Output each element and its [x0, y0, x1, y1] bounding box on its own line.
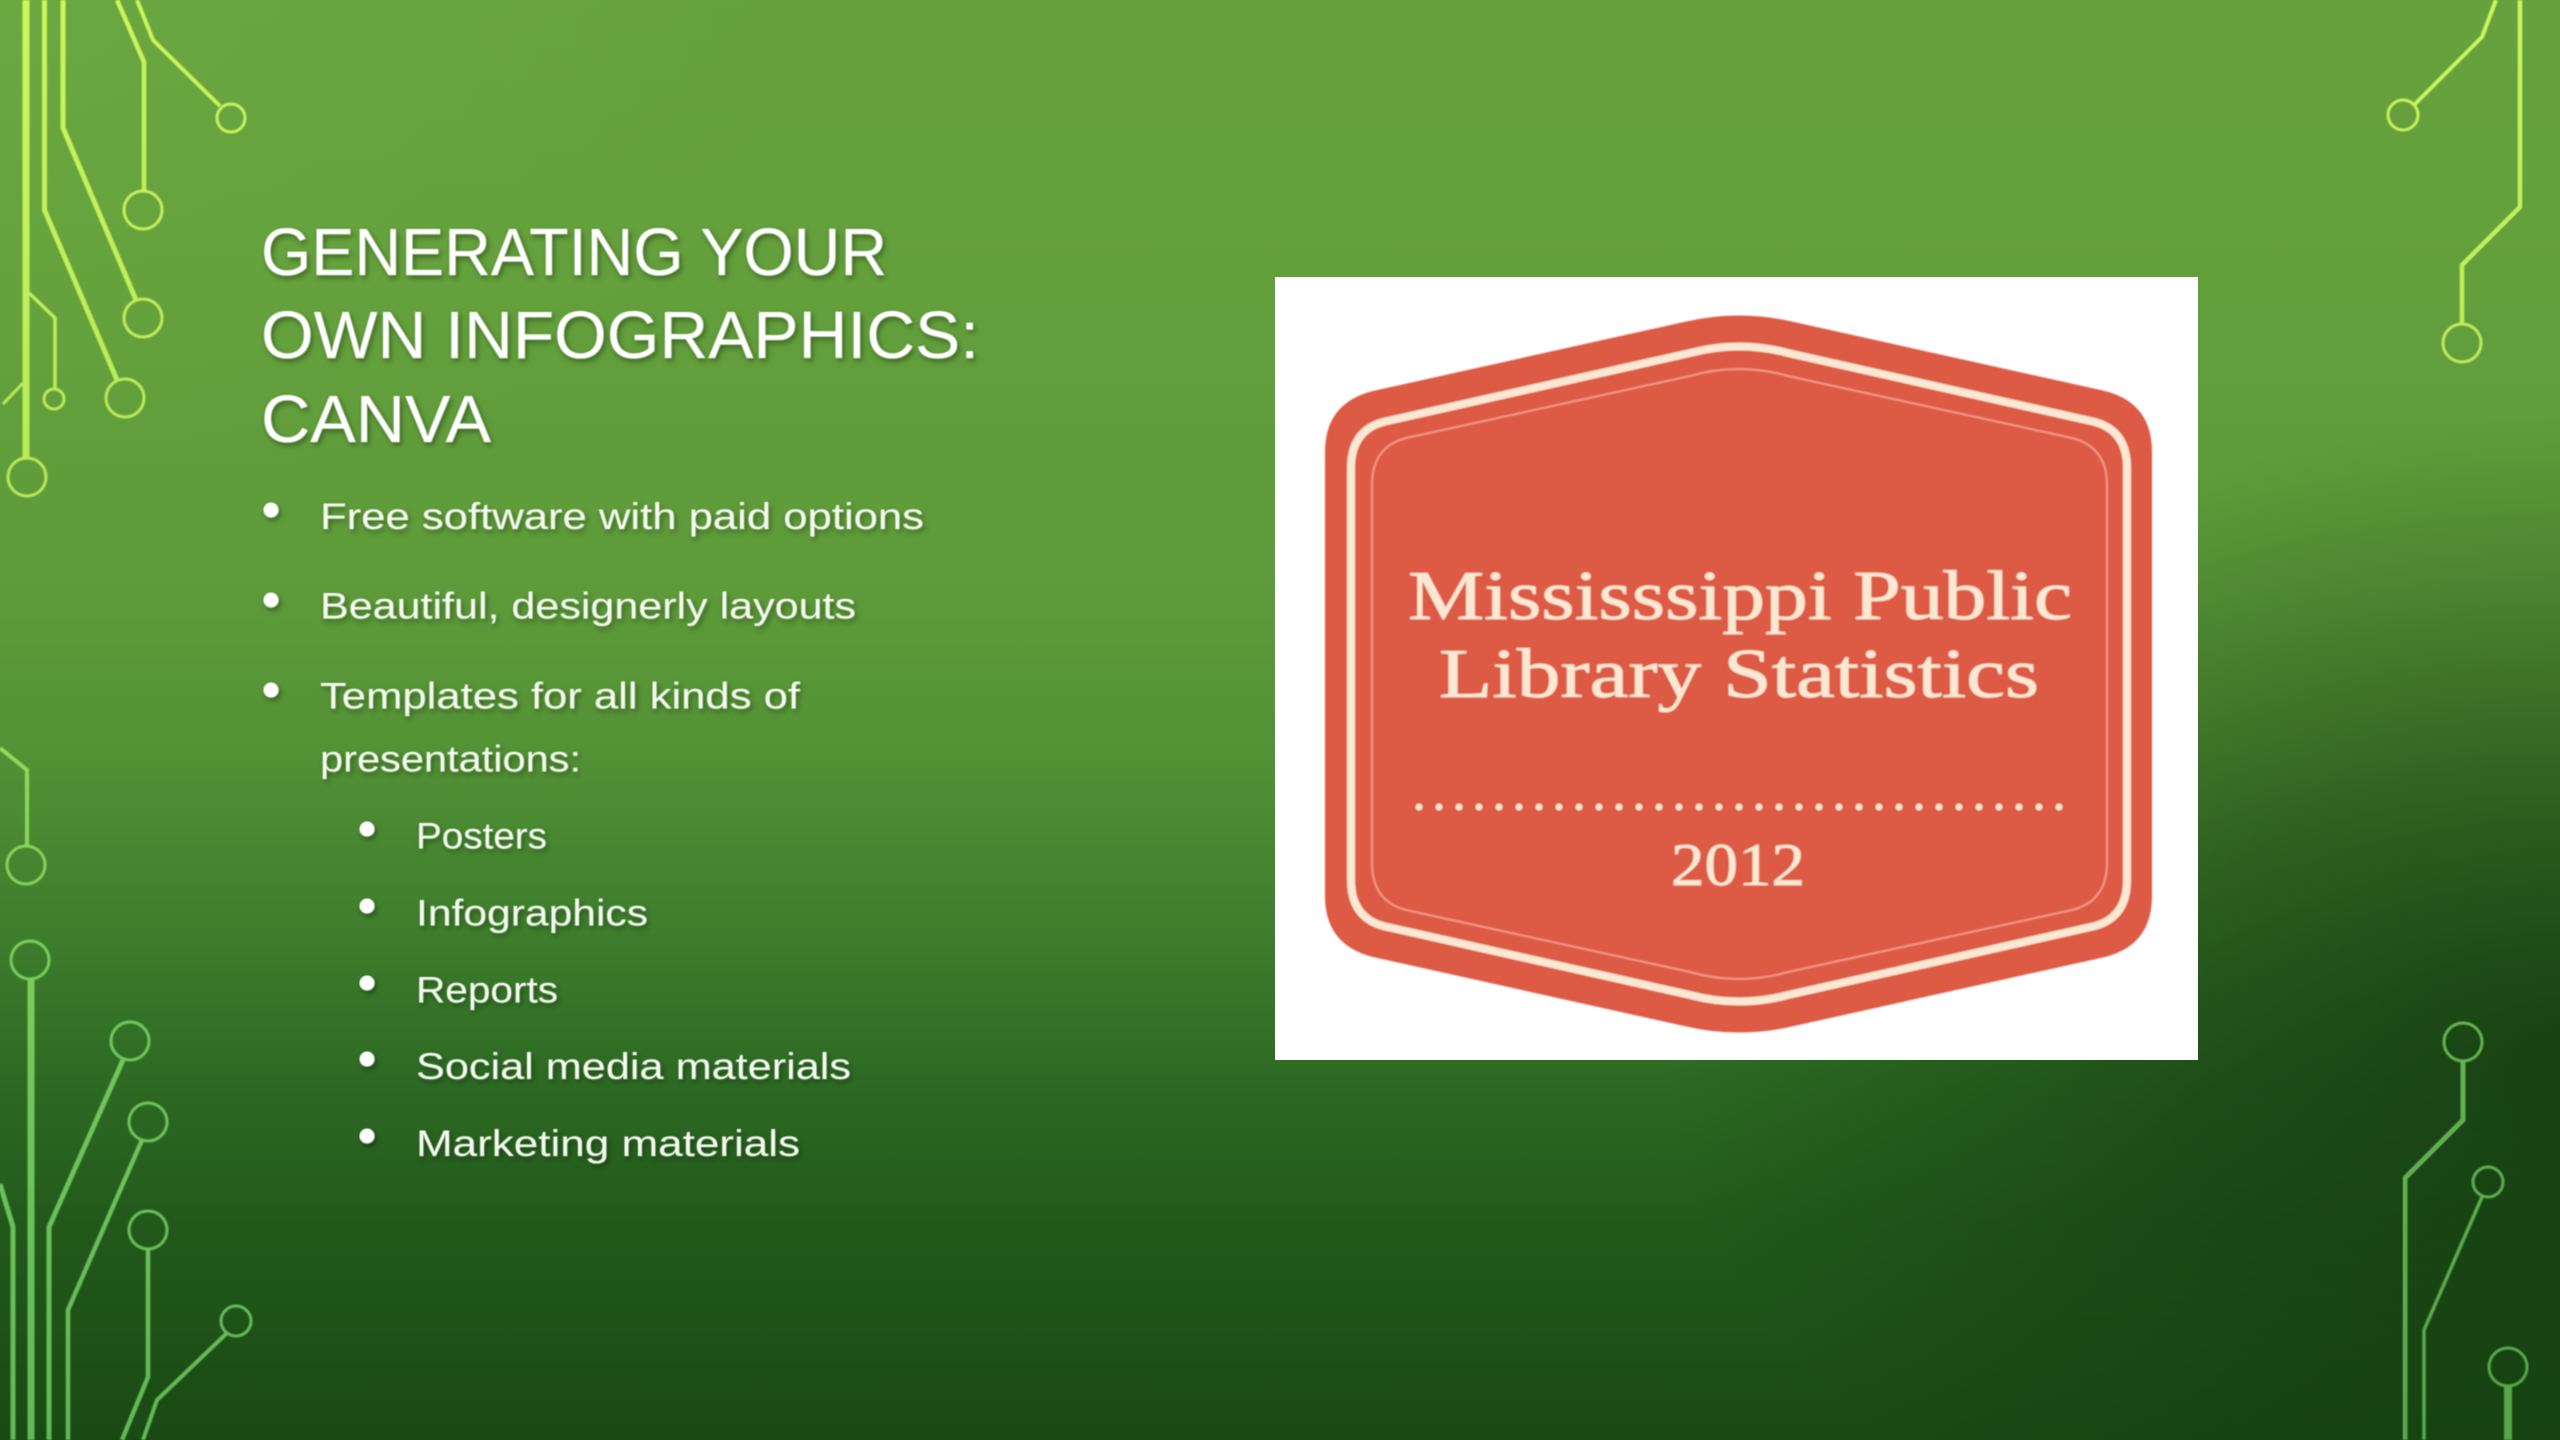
title: GENERATING YOUR [261, 215, 887, 290]
title: OWN INFOGRAPHICS: [261, 298, 979, 373]
title: CANVA [261, 382, 491, 457]
circuit lines: bottom left [0, 748, 251, 1440]
title [261, 215, 979, 457]
bullet list: main points: Templates for all kinds of [320, 676, 801, 716]
bullet list: main points: Free software with paid options [320, 496, 924, 537]
bullet list: main points: presentations: [320, 738, 581, 780]
badge heading: Mississsippi Public [1408, 558, 2072, 635]
bullet list: main points [264, 496, 924, 780]
circuit lines: top right [2388, 0, 2520, 362]
bullet list: presentation types: Social media materials [416, 1046, 851, 1087]
bullet list: presentation types: Reports [416, 970, 558, 1010]
badge heading [1408, 558, 2072, 713]
bullet list: main points: Beautiful, designerly layouts [320, 586, 856, 626]
bullet list: presentation types [360, 816, 851, 1164]
bullet list: presentation types: Posters [416, 816, 547, 856]
badge year: 2012 [1671, 832, 1805, 898]
circuit lines: top left [3, 0, 245, 496]
badge thin inner line [1372, 369, 2107, 979]
bullet list: presentation types: Infographics [416, 892, 648, 934]
badge dotted divider [1419, 804, 2061, 810]
badge heading: Library Statistics [1439, 636, 2039, 713]
badge shape [1325, 316, 2152, 1032]
badge cream ring [1351, 346, 2127, 1002]
bullet list: presentation types: Marketing materials [416, 1123, 800, 1164]
circuit lines: bottom right [2405, 1023, 2527, 1440]
image: Mississippi Public Library Statistics badge [1275, 277, 2198, 1060]
